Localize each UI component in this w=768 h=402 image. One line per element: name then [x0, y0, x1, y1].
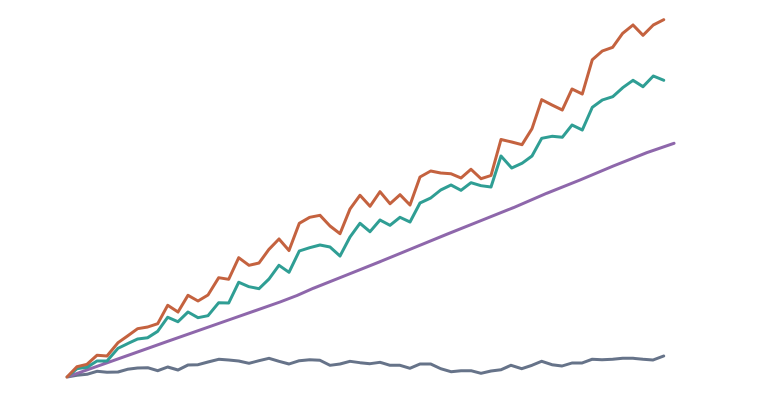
line: purple series: [67, 143, 674, 377]
line: red series: [67, 20, 664, 377]
line: teal series: [67, 76, 664, 377]
line: grey series: [67, 356, 664, 377]
